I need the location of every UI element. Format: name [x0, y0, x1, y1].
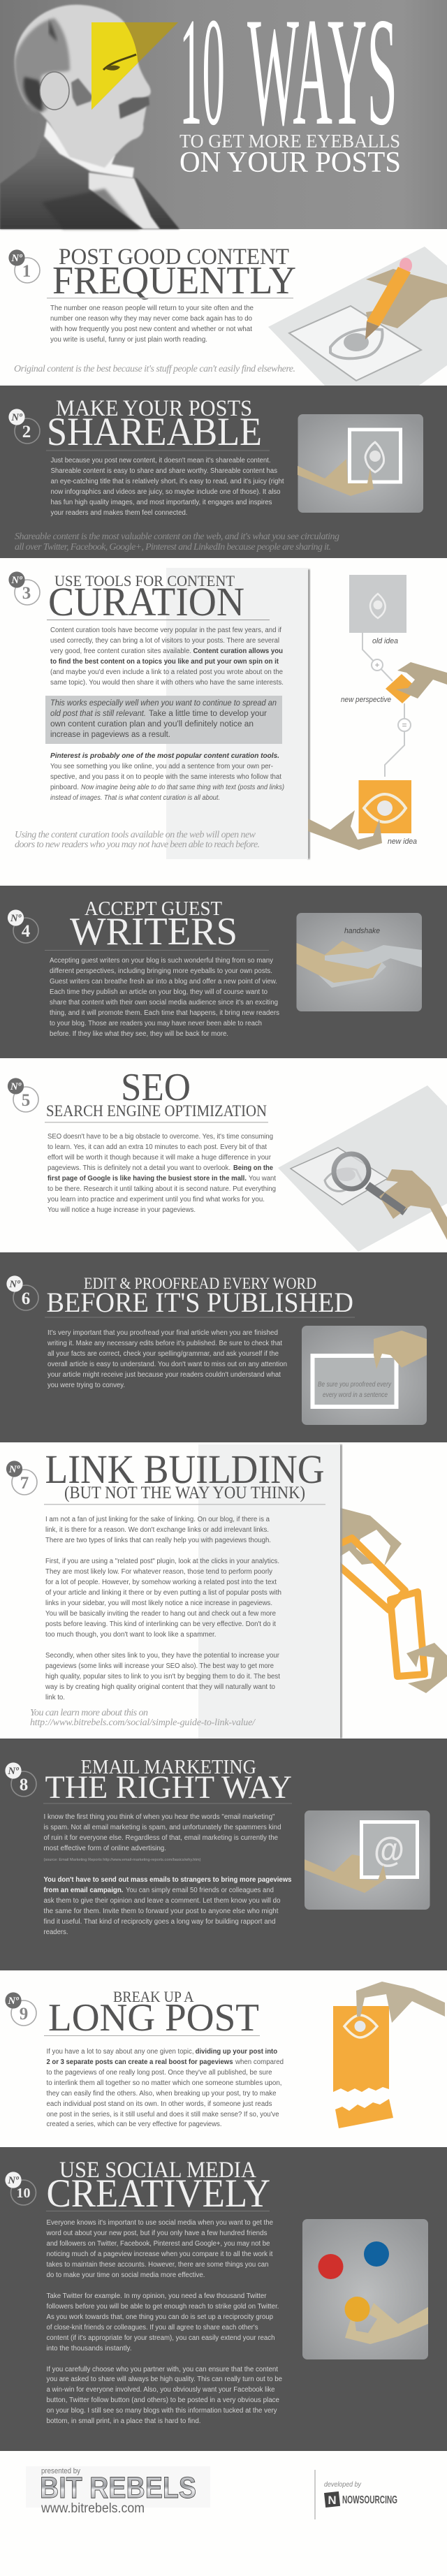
illustration: torn orange tag	[333, 1982, 445, 2128]
body text: readers.	[43, 1929, 68, 1936]
body text: You don't have to send out mass emails to strangers to bring more pageviews	[43, 1876, 292, 1884]
badge no 1	[8, 249, 40, 283]
body text: do to make your time on social media more effective.	[46, 2271, 205, 2279]
body text: takes to maintain these accounts. However, there are some things you can	[46, 2261, 268, 2269]
body text	[45, 1516, 281, 1702]
body text	[46, 2048, 284, 2128]
badge no 7	[6, 1461, 37, 1495]
body text: Accepting guest writers on your blog is such wonderful thing from so many	[50, 957, 273, 965]
heading: SHAREABLE	[47, 410, 262, 454]
body text: content (if it's appropriate for your stream), you can easily extend your reach	[46, 2334, 275, 2342]
body text: Shareable content is easy to share and share worthy. Shareable content has	[50, 467, 277, 475]
body text: pageviews (some links will increase your SEO also). The best way to get more	[45, 1662, 274, 1670]
body text: your article might receive just because your readers couldn't understand what	[47, 1371, 281, 1379]
body text: writing it. Make any necessary edits before it's published. Be sure to check that	[47, 1340, 282, 1347]
body text: Content curation tools have become very popular in the past few years, and if	[50, 627, 281, 634]
badge no 1: Nº	[10, 253, 22, 264]
body text: button, Twitter follow button (and others) to be posted in a very obvious place	[46, 2396, 280, 2404]
quote: Using the content curation tools available on the web will open new	[15, 830, 256, 840]
body text: It's very important that you proofread your final article when you are finished	[47, 1329, 278, 1337]
pinterest text: Now imagine being able to do that same thing with text (posts and links)	[81, 784, 284, 791]
panel: section 2 shareable	[0, 386, 447, 558]
body text: Everyone knows it's important to use social media when you want to get the	[46, 2219, 274, 2227]
badge no 7: Nº	[8, 1464, 20, 1475]
yellow triangle over eye	[91, 22, 178, 110]
heading: USE SOCIAL MEDIA	[59, 2158, 256, 2183]
heading	[45, 1275, 355, 1318]
heading: BREAK UP A	[113, 1988, 194, 2005]
quote	[15, 830, 260, 850]
badge no 8	[5, 1762, 36, 1796]
quote: doors to new readers who you may not have been able to reach before.	[15, 840, 260, 850]
illustration: old idea plus new perspective equals new idea: +	[374, 660, 380, 670]
body text: you were trying to convey.	[47, 1382, 125, 1389]
illustration card: handshake	[296, 913, 422, 1011]
heading: ACCEPT GUEST	[85, 898, 222, 920]
body text: to be there. Research it until talking about it is second nature. Put everything	[47, 1185, 276, 1193]
badge no 6: 6	[22, 1289, 30, 1308]
quote	[15, 532, 339, 552]
body text: First, if you are using a "related post" plugin, look at the clicks in your analytics.	[45, 1558, 279, 1565]
developed by nowsourcing logo: N	[328, 2494, 337, 2507]
badge no 2	[8, 409, 40, 444]
footer	[26, 2466, 397, 2519]
panel: section 6 edit and proofread	[0, 1252, 447, 1442]
heading: LINK BUILDING	[45, 1447, 324, 1492]
pinterest text: spective, and you pass it on to people with the same interests who follow that	[50, 773, 281, 781]
body text	[50, 957, 279, 1038]
pinterest text	[50, 752, 284, 802]
presented by bit rebels logo: BIT REBELS	[40, 2471, 196, 2505]
panel: section 4 guest writers	[0, 886, 447, 1058]
badge no 5: Nº	[10, 1081, 22, 1092]
body text: a win-win for everyone involved. Also, you obviously want your Facebook like	[46, 2386, 275, 2394]
illustration card: proofread page	[302, 1326, 427, 1425]
body text: same topic). You would then share it with others who have the same interests.	[50, 679, 284, 687]
badge no 5	[8, 1078, 38, 1112]
illustration: magnifying glass over eye	[278, 1085, 447, 1252]
body text: to learn. Yes, it can add an extra 10 minutes to each post. Every bit of that	[47, 1143, 267, 1151]
quote	[30, 1708, 256, 1728]
callout box: Take a little time to develop your	[149, 710, 267, 718]
badge no 4: Nº	[10, 913, 22, 924]
body text: You can simply email 50 friends or colleagues and	[126, 1887, 274, 1894]
panel: section 5 seo	[8, 1066, 447, 1252]
body text: You will be basically inviting the reader to hang out and check out a few more	[45, 1610, 277, 1618]
heading: SEARCH ENGINE OPTIMIZATION	[46, 1102, 267, 1120]
portrait of man in profile	[0, 5, 179, 229]
callout box: own content curation plan and you'll definitely notice an	[50, 720, 254, 729]
body text: There are two types of links that can really help you with pageviews though.	[45, 1537, 271, 1544]
body text: followers before you will be able to get enough reach to strike gold on Twitter.	[46, 2303, 279, 2311]
illustration: hands holding chain	[332, 1507, 447, 1693]
body text: Guest writers can breathe fresh air into a blog and offer a new point of view.	[50, 978, 277, 986]
body text: an eye-catching title that is relatively short, it's easy to read, and it's juicy (right	[50, 478, 284, 485]
light background panel	[166, 568, 310, 859]
badge no 9: Nº	[7, 1996, 19, 2007]
developed by nowsourcing logo: developed by	[324, 2480, 362, 2489]
body text: on your blog. I still see so many blogs with this information tucked at the very	[46, 2407, 277, 2415]
developed by nowsourcing logo	[324, 2480, 397, 2508]
body text: dividing up your post into	[196, 2048, 277, 2056]
body text: for a lot of people. However, by somehow working a related post into the text	[45, 1579, 277, 1586]
body text: of close-knit friends or colleagues. If you all agree to share each other's	[46, 2324, 258, 2332]
illustration card: handshake: handshake	[344, 927, 380, 935]
body text: you are asked to share will always be high quality. This can really turn out to be	[46, 2376, 283, 2383]
badge no 5: 5	[22, 1091, 30, 1110]
illustration: pencil drawing eye	[268, 247, 447, 386]
badge no 10: 10	[17, 2186, 31, 2201]
panel: section 8 email marketing	[0, 1739, 447, 1970]
body text: too much though, you don't want to look like a spammer.	[45, 1631, 217, 1639]
badge no 6: Nº	[8, 1279, 20, 1290]
panel: section 10 social media	[0, 2147, 447, 2451]
body text: way is by creating high quality original content that they will naturally want to	[45, 1683, 276, 1691]
callout box: increase in pageviews as a result.	[50, 731, 170, 739]
light background panel	[198, 1444, 342, 1739]
body text: word out about your new post, but if you only have a few hundred friends	[45, 2230, 268, 2237]
illustration card: juggling coloured balls	[302, 2219, 428, 2359]
badge no 9	[5, 1992, 36, 2026]
body text: into the thousands instantly.	[46, 2345, 131, 2352]
body text: used correctly, they can bring a lot of visitors to your posts. There are several	[50, 637, 279, 645]
illustration card: proofread page: every word in a sentence	[323, 1391, 388, 1399]
body text: Each time they publish an article on your blog, they will of course want to	[50, 988, 268, 996]
body text: number one reason why they may never come back again has to do	[50, 315, 253, 323]
body text: high quality, popular sites to link to you isn't by begging them to do it. The best	[45, 1673, 280, 1681]
body text: links in your sidebar, you will most likely notice a nice increase in pageviews.	[45, 1600, 272, 1607]
pinterest text: pinboard.	[50, 784, 79, 791]
body text: and followers on Twitter, Facebook, Pinterest and Google+, you may not be	[46, 2240, 270, 2248]
body text: when compared	[235, 2058, 284, 2066]
illustration card: email at sign	[305, 1810, 430, 1910]
illustration card: email at sign: @	[374, 1830, 404, 1869]
badge no 2: 2	[22, 423, 31, 441]
body text: share that content with their own social media audience since it's an exciting	[50, 999, 278, 1007]
panel: section 3 curation	[8, 568, 447, 859]
badge no 4: 4	[22, 922, 31, 941]
body text: The number one reason people will return to your site often and the	[50, 305, 254, 312]
illustration card: hand touching page	[298, 414, 423, 513]
body text: link to.	[45, 1694, 65, 1702]
badge no 3	[8, 571, 40, 605]
badge no 1: 1	[22, 262, 31, 281]
body text	[43, 1813, 292, 1936]
body text: (source: Email Marketing Reports http://www.email-marketing-reports.com/basics/why.htm)	[43, 1858, 201, 1862]
body text: first page of Google is like having the busiest store in the mall.	[47, 1175, 247, 1183]
heading: THE RIGHT WAY	[45, 1769, 292, 1806]
heading: EDIT & PROOFREAD EVERY WORD	[84, 1275, 316, 1292]
body text: I am not a fan of just linking for the sake of linking. On our blog, if there is a	[45, 1516, 270, 1523]
body text: all your facts are correct, check your spelling/grammar, and ask yourself if the	[47, 1350, 279, 1358]
body text: Take Twitter for example. In my opinion, you need a few thousand Twitter	[46, 2292, 267, 2300]
badge no 6	[6, 1275, 38, 1310]
pinterest text: Pinterest is probably one of the most popular content curation tools.	[50, 752, 279, 760]
body text: Content curation allows you	[193, 647, 283, 655]
heading: EMAIL MARKETING	[81, 1757, 256, 1778]
body text: They are most likely low. For whatever reason, those tend to perform poorly	[45, 1568, 272, 1576]
body text: from an email campaign.	[43, 1887, 124, 1894]
heading: BEFORE IT'S PUBLISHED	[46, 1287, 353, 1318]
badge no 10	[5, 2172, 36, 2205]
body text: As you work towards that, one thing you can do is set up a reciprocity group	[46, 2313, 274, 2321]
body text: very good, free content curation sites available.	[50, 647, 191, 655]
main title: TO GET MORE EYEBALLS	[179, 131, 400, 152]
body text: to interlink them all together so no matter which one someone stumbles upon,	[46, 2079, 282, 2087]
quote: Original content is the best because it's stuff people can't easily find elsewhere.	[14, 364, 295, 374]
pinterest text: instead of images. That is what content curation is all about.	[50, 794, 220, 802]
body text: they can easily find the others. Also, when breaking up your post, try to make	[46, 2090, 277, 2098]
body text: I know the first thing you think of when you hear the words "email marketing"	[43, 1813, 275, 1821]
body text	[50, 305, 254, 344]
heading: USE TOOLS FOR CONTENT	[54, 572, 235, 590]
heading: WRITERS	[70, 910, 237, 953]
quote: You can learn more about this on	[30, 1708, 148, 1718]
heading: LONG POST	[48, 1996, 259, 2040]
body text: the same for them. Invite them to forward your post to anyone else who might	[43, 1908, 279, 1915]
heading: SEO	[121, 1066, 191, 1109]
illustration: old idea plus new perspective equals new idea: new idea	[388, 837, 417, 846]
body text: ask them to give their opinion and leave a comment. Let them know you will do	[43, 1897, 281, 1905]
header panel	[0, 0, 447, 229]
body text: one post in the series, is it still useful and does it still make sense? If so, you've	[46, 2111, 279, 2118]
heading: CURATION	[48, 579, 244, 624]
body text: different perspectives, including bringing more eyeballs to your own posts.	[50, 967, 272, 975]
body text: SEO doesn't have to be a big obstacle to overcome. Yes, it's time consuming	[47, 1133, 273, 1141]
illustration: old idea plus new perspective equals new idea: new perspective	[341, 696, 391, 704]
heading	[45, 1066, 268, 1123]
body text: If you carefully choose who you partner with, you can ensure that the content	[46, 2366, 278, 2373]
quote: Shareable content is the most valuable content on the web, and it's what you see circulating	[15, 532, 339, 542]
body text	[50, 627, 284, 687]
body text: of your article and linking it there or by even putting a list of popular posts with	[45, 1589, 281, 1597]
badge no 3: Nº	[10, 575, 22, 586]
body text	[47, 1329, 287, 1389]
callout box: old post that is still relevant.	[50, 710, 146, 718]
body text: has fun high quality images, and most importantly, it engages and inspires	[50, 499, 272, 506]
body text: You will notice a huge increase in your pageviews.	[47, 1206, 196, 1214]
developed by nowsourcing logo: NOWSOURCING	[342, 2494, 397, 2506]
badge no 3: 3	[22, 584, 31, 603]
body text: effort will be worth it though because it will make a huge difference in your	[47, 1154, 272, 1162]
callout box	[45, 696, 282, 744]
body text: If you have a lot to say about any one given topic,	[46, 2048, 194, 2056]
body text: pageviews. This is definitely not a detail you want to overlook.	[47, 1164, 230, 1172]
panel: section 9 long post	[5, 1982, 445, 2128]
body text	[47, 1133, 276, 1214]
body text: Secondly, when other sites link to you, they have the potential to increase your	[45, 1652, 280, 1660]
body text: bottom, in small print, in a place that is hard to find.	[46, 2417, 201, 2425]
heading: (BUT NOT THE WAY YOU THINK)	[64, 1484, 305, 1502]
body text: to find the best content on a topics you like and put your own spin on it	[50, 658, 279, 666]
body text: Just because you post new content, it doesn't mean it's shareable content.	[50, 457, 271, 464]
main title: ON YOUR POSTS	[179, 147, 401, 179]
badge no 7: 7	[20, 1474, 29, 1493]
body text: you write is useful, funny or just plain worth reading.	[50, 336, 207, 344]
panel: section 1 post good content	[8, 244, 447, 386]
body text	[50, 457, 284, 517]
quote: all over Twitter, Facebook, Google+, Pinterest and LinkedIn because people are sharing it.	[15, 542, 331, 552]
body text: posts before leaving. This kind of interlinking can be very effective. Don't do it	[45, 1620, 276, 1628]
body text: (and maybe you'd even include a link to a related post you wrote about on the	[50, 668, 284, 676]
body text: find it useful. That kind of reciprocity goes a long way for building rapport and	[43, 1918, 275, 1926]
illustration: old idea plus new perspective equals new idea: =	[402, 720, 407, 730]
heading: FREQUENTLY	[52, 259, 296, 302]
badge no 4	[8, 909, 38, 943]
badge no 8: Nº	[7, 1766, 19, 1777]
body text: your readers and makes them feel connected.	[50, 509, 187, 517]
body text: thing, and it will promote them. Each time that happens, it bring new readers	[50, 1009, 279, 1017]
body text: noticing much of a pageview increase when you compare it to all the work it	[46, 2251, 273, 2258]
body text: of ruin it for everyone else. Regardless of that, email marketing is currently the	[43, 1834, 279, 1842]
heading: MAKE YOUR POSTS	[56, 396, 252, 421]
body text: overall article is easy to understand. You don't want to miss out on any attention	[47, 1361, 287, 1368]
presented by bit rebels logo: www.bitrebels.com	[41, 2501, 145, 2516]
body text: created a series, which can be very effective for pageviews.	[46, 2121, 222, 2128]
heading	[45, 898, 269, 953]
presented by bit rebels logo	[26, 2466, 210, 2516]
body text: each individual post stand on its own. In other words, if someone just reads	[46, 2100, 272, 2108]
body text	[45, 2219, 283, 2425]
panel: section 7 link building	[6, 1444, 447, 1739]
badge no 9: 9	[20, 2005, 28, 2024]
pinterest text: You see something you like online, you add a sentence from your own per-	[50, 763, 273, 770]
body text: is spam. Not all email marketing is spam, and unfortunately the spammers kind	[43, 1824, 281, 1831]
presented by bit rebels logo: presented by	[41, 2467, 80, 2475]
body text: You want	[249, 1175, 276, 1183]
body text: Being on the	[233, 1164, 274, 1172]
body text: 2 or 3 separate posts can create a real boost for pageviews	[46, 2058, 233, 2066]
body text: to your blog. Those are readers you may have never been able to reach	[50, 1020, 262, 1027]
quote: http://www.bitrebels.com/social/simple-guide-to-link-value/	[30, 1718, 256, 1728]
illustration: old idea plus new perspective equals new idea	[308, 575, 447, 850]
heading: CREATIVELY	[46, 2172, 270, 2216]
body text: link, it is there for a reason. We don't exchange links or add irrelevant links.	[45, 1526, 269, 1534]
body text: with how frequently you post new content and whether or not what	[50, 325, 252, 333]
body text: to the pageviews of one really long post. Once they've all published, be sure	[46, 2069, 272, 2077]
main title	[179, 0, 401, 179]
body text: now infographics and videos are juicy, so maybe include one of those). It also	[50, 488, 281, 496]
heading: POST GOOD CONTENT	[59, 244, 289, 270]
body text: most effective form of online advertising.	[43, 1845, 166, 1852]
illustration card: proofread page: Be sure you proofreed every	[318, 1381, 392, 1389]
callout box: This works especially well when you want to continue to spread an	[50, 699, 277, 708]
badge no 8: 8	[20, 1776, 28, 1794]
body text: before. If they like what they see, they will be back for more.	[50, 1030, 228, 1038]
badge no 2: Nº	[10, 412, 22, 423]
illustration: old idea plus new perspective equals new idea: old idea	[372, 637, 398, 645]
body text: you learn into practice and experiment until you find what works for you.	[47, 1196, 265, 1203]
badge no 10: Nº	[7, 2175, 19, 2186]
